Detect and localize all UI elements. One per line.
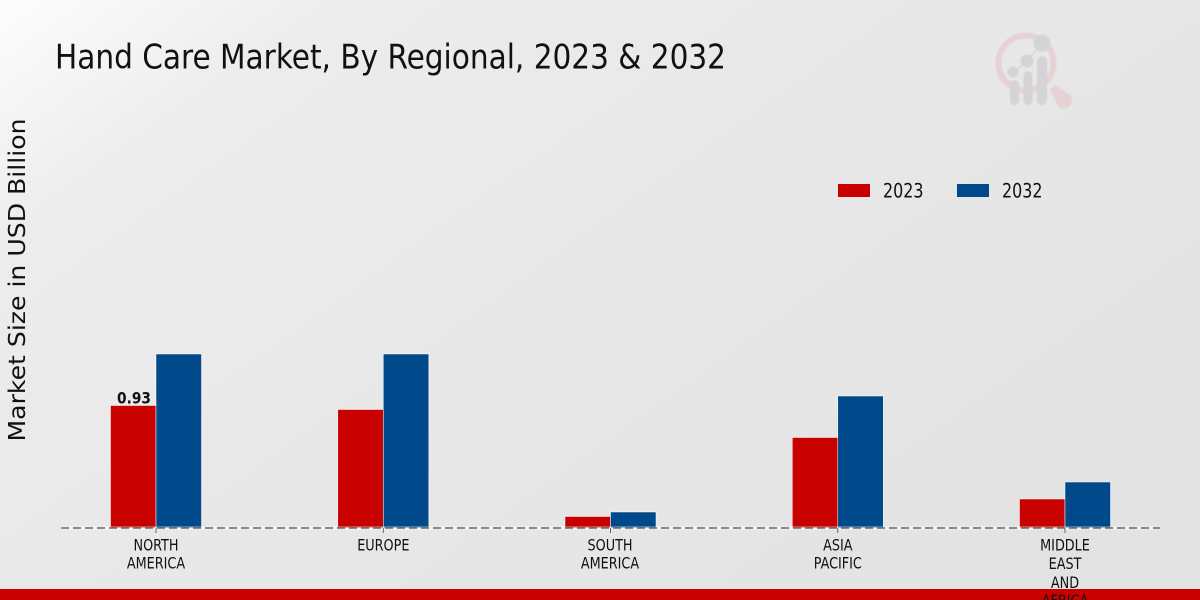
x axis label: Middle East and Africa: AND <box>1051 573 1079 592</box>
footer bar <box>0 589 1200 600</box>
x axis label: South America: SOUTH <box>588 536 632 555</box>
icon: watermark logo <box>998 34 1072 108</box>
x axis label: Europe: EUROPE <box>357 536 409 555</box>
x axis label: Asia Pacific: ASIA <box>823 536 853 555</box>
legend item: 2032: 2032 <box>1002 180 1042 202</box>
x axis label: North America: NORTH <box>134 536 178 555</box>
bars: South America <box>565 512 656 528</box>
x axis label: Middle East and Africa: MIDDLE <box>1040 536 1090 555</box>
bar chart <box>61 354 1160 533</box>
x axis label: North America: AMERICA <box>127 554 186 573</box>
title: Hand Care Market, By Regional, 2023 & 2032 <box>55 38 726 76</box>
y axis label: Market Size in USD Billion <box>4 118 31 442</box>
x axis label: Middle East and Africa: EAST <box>1049 554 1082 573</box>
bars: Asia Pacific <box>792 396 883 528</box>
legend item: 2023: 2023 <box>883 180 924 202</box>
bars: Middle East and Africa <box>1020 482 1110 528</box>
x axis label: South America: AMERICA <box>581 554 640 573</box>
legend item: 2023 <box>838 180 924 202</box>
bars: Europe <box>338 354 429 528</box>
legend <box>838 180 1042 202</box>
x axis label: Asia Pacific: PACIFIC <box>814 554 862 573</box>
legend item: 2032 <box>957 180 1042 202</box>
bars: North America <box>110 354 202 528</box>
value label: 0.93: 0.93 <box>117 388 151 408</box>
